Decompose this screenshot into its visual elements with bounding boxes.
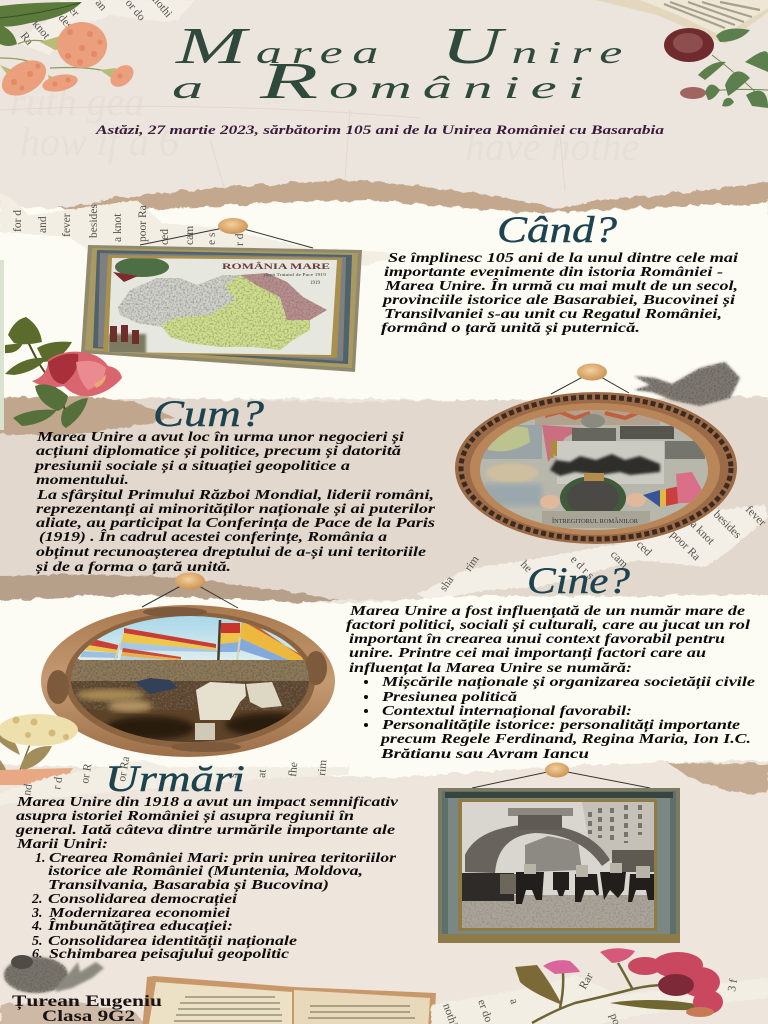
text: Urmări paragraph and list: Modernizarea economiei [48, 906, 230, 921]
text: Urmări paragraph and list: 4. [31, 919, 42, 934]
text: Urmări paragraph and list: 2. [31, 892, 42, 907]
map soldiers [108, 334, 146, 354]
paper strip: right diagonal: ced [634, 539, 654, 559]
calyxes [0, 33, 116, 85]
paper strip: right diagonal [417, 504, 768, 600]
paper strip bottom right [431, 971, 768, 1024]
text: Urmări paragraph and list: 1. [35, 851, 46, 866]
men in white [196, 682, 246, 720]
text: Cum paragraph: reprezentanți ai minorităților naționale și ai puterilor [36, 502, 436, 517]
map outline [118, 275, 286, 336]
title: a [172, 69, 215, 105]
green provinces [162, 275, 310, 350]
paper strip bottom right: er do [475, 998, 495, 1024]
map title: ROMÂNIA MARE [222, 261, 330, 271]
pin [545, 762, 569, 778]
text: Când paragraph: Se împlinesc 105 ani de la unul dintre cele mai [388, 251, 738, 266]
pin [577, 364, 607, 380]
text: Cum paragraph: presiunii sociale și a situației geopolitice a [34, 459, 350, 474]
paper strip: under Urmări heading: rim [316, 759, 329, 776]
tricolor flag [643, 490, 666, 507]
map emblem [115, 257, 169, 277]
faint handwriting texture: ruth gea [10, 79, 144, 124]
paper strip: right diagonal: sha [438, 574, 456, 594]
faint handwriting texture [0, 79, 642, 889]
title: U nire [441, 18, 632, 75]
text: Când paragraph: formând o țară unită și puternică. [381, 321, 640, 336]
text: Cum paragraph: Marea Unire a avut loc în urma unor negocieri și [36, 430, 404, 445]
paper strip: top left: ver [63, 0, 81, 19]
paper strip: under Urmări heading: or R [79, 762, 95, 785]
text: Cum paragraph: aliate, au participat la Conferința de Pace de la Paris [36, 516, 436, 531]
author credit [12, 993, 162, 1024]
paper strip: under Urmări heading: s [227, 772, 239, 778]
tape [0, 768, 73, 785]
text: Cine paragraph: Presiunea politică [382, 690, 517, 705]
rose bloom [32, 352, 122, 396]
pin [175, 572, 205, 590]
paper strip: left of map: cam [184, 226, 196, 245]
portrait medallion [560, 476, 626, 511]
paper strip: left of map: a knot [112, 213, 124, 242]
text: Urmări paragraph and list: 6. [32, 947, 42, 962]
flag right square [221, 623, 240, 633]
horses and riders [516, 872, 654, 904]
blossoms [543, 960, 580, 974]
flag right big [240, 623, 306, 668]
paper strip: right diagonal: e d r s [568, 554, 596, 582]
paper strip: top left: Ra [18, 30, 35, 48]
paper strip: under Urmări heading: r d [51, 776, 65, 791]
title: R omâniei [258, 53, 595, 110]
text: Când paragraph: Transilvaniei s-au unit cu Regatul României, [384, 307, 722, 322]
flowers: top right rose [664, 28, 768, 108]
paper strip bottom right: a [507, 997, 520, 1006]
paper strip bottom right: 3 f [726, 978, 740, 993]
text: Urmări paragraph and list: 5. [32, 934, 42, 949]
hanger [142, 581, 238, 608]
text: Cine paragraph [346, 604, 755, 762]
text: Urmări paragraph and list: Transilvania, Basarabia și Bucovina) [48, 878, 329, 893]
bird bottom left [4, 955, 104, 993]
text: Cine paragraph: Marea Unire a fost influențată de un număr mare de [349, 604, 745, 619]
text: Cum paragraph: și de a forma o țară unită. [35, 560, 231, 575]
crowd [60, 660, 320, 682]
flag main [124, 628, 216, 648]
text: Urmări paragraph and list: Consolidarea identității naționale [48, 934, 297, 949]
paper strip: right diagonal: besides [711, 509, 744, 541]
text: Când heading: Când? [497, 210, 618, 251]
angels left [486, 463, 538, 483]
paper strip: left of map: besides [88, 204, 100, 238]
framed map picture: 1919 [310, 281, 320, 286]
paper strip: left of map: poor Ra [137, 205, 149, 242]
text: Când paragraph: provinciile istorice ale Basarabiei, Bucovinei și [382, 293, 735, 308]
paper strip: top left [15, 0, 195, 55]
text: Cum paragraph: obținut recunoașterea dreptului de a-și uni teritoriile [36, 545, 426, 560]
frame [438, 788, 680, 943]
title [172, 18, 632, 110]
cream band: Când [0, 200, 768, 404]
brown torn edge: left of Cum [0, 396, 175, 436]
text: Cine paragraph: factori politici, sociali și culturali, care au jucat un rol [346, 618, 750, 633]
text: Cine paragraph: precum Regele Ferdinand, Regina Maria, Ion I.C. [380, 732, 751, 747]
pink province [240, 273, 327, 320]
paper strip bottom right: Rar [577, 971, 596, 992]
text: Urmări paragraph and list: istorice ale României (Muntenia, Moldova, [48, 864, 363, 879]
text: Urmări paragraph and list: 3. [31, 906, 42, 921]
frame [455, 392, 737, 544]
flag low [122, 648, 181, 659]
paper strip: right diagonal: a knot [688, 519, 717, 548]
pink flower bottom right [515, 948, 723, 1023]
text: Urmări paragraph and list: Consolidarea democrației [48, 892, 237, 907]
paper strip: under Urmări heading: fhe [287, 762, 300, 777]
text: Când paragraph [381, 251, 738, 336]
text: Cum paragraph: La sfârșitul Primului Război Mondial, liderii români, [36, 488, 434, 503]
text: Urmări heading: Urmări [105, 759, 245, 800]
subtitle: Astăzi, 27 martie 2023, sărbătorim 105 ani de la Unirea României cu Basarabia [95, 123, 664, 137]
text: Cine paragraph: influențat la Marea Unire se numără: [349, 661, 632, 676]
faint handwriting texture: hewe [560, 844, 642, 889]
paper strip: right diagonal: he [518, 559, 534, 575]
framed photo of arch [438, 762, 680, 943]
frame [81, 245, 362, 372]
flower: cream with tape [0, 714, 78, 785]
paper patch bottom left [0, 1000, 150, 1024]
paper strip: under Urmări heading: or Ra [116, 756, 132, 783]
text: Urmări paragraph and list: Schimbarea peisajului geopolitic [49, 947, 290, 962]
text: Cum paragraph: momentului. [36, 473, 129, 488]
orange clusters [0, 22, 138, 103]
framed map picture: după Tratatul de Pace 1919 [264, 272, 327, 277]
text: Urmări paragraph and list: Crearea României Mari: prin unirea teritoriilor [49, 851, 397, 866]
paper strip: left of map: r d [234, 233, 246, 246]
brown torn edge: right [668, 763, 768, 794]
brown torn edge: above flag oval [0, 574, 340, 606]
pin [218, 218, 248, 234]
text: Cine heading: Cine? [527, 561, 631, 602]
hanger [472, 770, 650, 788]
paper strip: left of map: fever [61, 213, 73, 237]
flowers: top left [0, 2, 138, 103]
paper strip: left of map: ced [159, 229, 171, 245]
text: Cine paragraph: Personalitățile istorice: personalități importante [382, 718, 740, 733]
mid building [525, 836, 582, 872]
author credit: Țurean Eugeniu [12, 993, 162, 1011]
leaves [515, 965, 562, 1005]
frame [41, 605, 335, 757]
dark rose [664, 28, 714, 62]
crowd left [462, 873, 514, 901]
text: Cum paragraph [34, 430, 436, 575]
text: Cum paragraph: (1919) . În cadrul acestei conferințe, România a [39, 528, 387, 545]
text: Cine paragraph: Contextul internațional favorabil: [382, 704, 632, 719]
flag left rear [90, 640, 118, 650]
paper strip: right diagonal: rim [463, 554, 482, 574]
text: Urmări paragraph and list: general. Iată câteva dintre urmările importante ale [15, 823, 395, 838]
paper strip: left of map: and [37, 216, 49, 233]
angels beside medallion [540, 495, 560, 509]
text: Cine paragraph: unire. Printre cei mai importanți factori care au [349, 646, 706, 661]
text: Când paragraph: importante evenimente din istoria României - [384, 265, 723, 280]
book: top right [596, 0, 768, 44]
top photos [572, 428, 616, 441]
hanger [551, 372, 629, 394]
paper strip: right diagonal: poor Ra [668, 529, 702, 563]
lower leaves [13, 384, 88, 428]
framed map picture [81, 218, 362, 372]
ornament top [535, 410, 660, 425]
arch sign [508, 808, 573, 816]
map paper [108, 258, 337, 355]
oval flag picture [41, 572, 335, 757]
leaves [0, 2, 82, 46]
right buildings [582, 802, 654, 860]
faint handwriting texture: have hothe [465, 124, 639, 169]
moth [634, 362, 740, 406]
paper strip: top left: knot [30, 18, 53, 42]
parchment band: Cum [0, 396, 768, 606]
flower: pink rose left [0, 260, 122, 430]
text: Urmări paragraph and list: Marea Unire din 1918 a avut un impact semnificativ [16, 795, 399, 810]
text: Urmări paragraph and list: Marii Uniri: [16, 837, 108, 852]
oval collage picture [455, 364, 737, 544]
ground [462, 895, 654, 928]
hanger [140, 226, 313, 248]
central photo [557, 441, 664, 484]
flag poles [217, 620, 222, 660]
text: Cine paragraph: Mișcările naționale și organizarea societății civile [381, 675, 755, 690]
text: Când paragraph: Marea Unire. În urmă cu mai mult de un secol, [384, 277, 738, 294]
faint handwriting texture: how if a 6 [20, 119, 179, 164]
pink curtain [542, 425, 582, 462]
paper strip: left of map: for d [12, 210, 24, 232]
text: Cum heading: Cum? [153, 394, 265, 435]
paper strip: under Urmări heading: nd [21, 783, 35, 797]
open book bottom [142, 976, 436, 1024]
text: Urmări paragraph and list: asupra istoriei României și asupra regiunii în [16, 809, 354, 824]
text: Cine paragraph: Brătianu sau Avram Iancu [380, 747, 589, 762]
stems [532, 963, 665, 1023]
paper strip: left of map: e s [206, 232, 218, 245]
brown torn edge: upper [40, 180, 768, 222]
small map [482, 425, 542, 459]
oval collage picture: ÎNTREGITORUL ROMÂNILOR [552, 517, 638, 525]
paper strip: under Urmări heading: at [256, 768, 269, 778]
text: Urmări paragraph and list: Îmbunătățirea educației: [47, 917, 233, 934]
text: Cine paragraph: important în crearea unui context favorabil pentru [349, 632, 725, 647]
arch [465, 824, 610, 873]
paper strip: right diagonal: cam [608, 549, 630, 571]
pink figure [676, 472, 702, 503]
cream band: Cine [0, 594, 768, 778]
text: Urmări paragraph and list [15, 795, 399, 962]
frame ornaments [47, 607, 327, 752]
caption strip [542, 511, 650, 528]
paper strip: right diagonal: fever [743, 504, 768, 529]
text: Cum paragraph: acțiuni diplomatice și politice, precum și datorită [36, 444, 401, 459]
paper strip: under Urmări heading [0, 756, 350, 805]
parchment band: Urmări [0, 762, 768, 1024]
paper strip: left of map [0, 193, 392, 266]
paper strip: top left: des [56, 12, 75, 32]
title: M area [174, 18, 388, 75]
